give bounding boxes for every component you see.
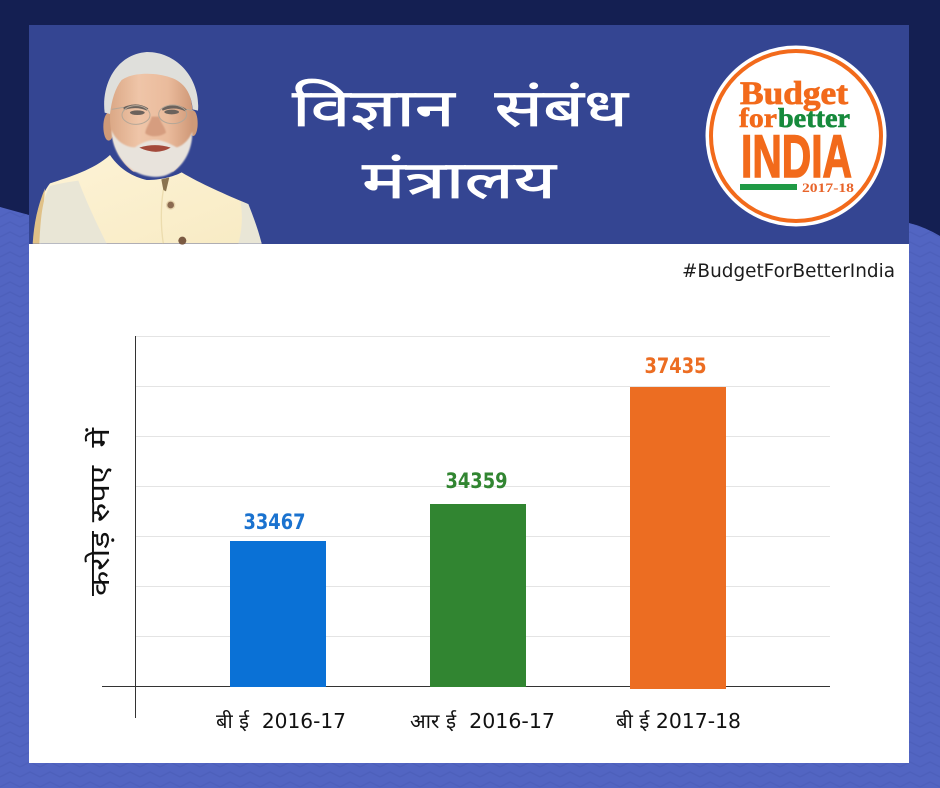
title bbox=[292, 80, 629, 210]
head bbox=[103, 52, 198, 177]
placket shading bbox=[161, 190, 163, 244]
left arm bbox=[39, 181, 107, 244]
bar chart bbox=[84, 336, 830, 733]
ears bbox=[103, 111, 198, 141]
portrait illustration bbox=[33, 52, 262, 245]
value 33467: 33467 bbox=[244, 510, 306, 534]
panel: white chart area bbox=[29, 244, 909, 763]
eyebrows and eyes bbox=[123, 104, 187, 115]
left sleeve edge bbox=[33, 188, 45, 244]
body bbox=[33, 155, 262, 245]
y axis label: करोड़ रुपए में bbox=[84, 427, 115, 596]
logo word better: better bbox=[778, 103, 850, 133]
right arm bbox=[238, 202, 262, 244]
hair bbox=[104, 52, 198, 114]
bar: BE 2016-17 bbox=[230, 541, 326, 687]
face bbox=[110, 68, 193, 172]
category label 3: बी ई 2017-18 bbox=[616, 709, 741, 733]
nose bbox=[145, 117, 166, 136]
value 37435: 37435 bbox=[644, 354, 706, 378]
value 34359: 34359 bbox=[446, 469, 508, 493]
logo word for: for bbox=[739, 103, 777, 133]
logo year: 2017-18 bbox=[802, 180, 855, 195]
title line 2: मंत्रालय bbox=[362, 152, 557, 210]
title line 1: विज्ञान संबंध bbox=[292, 80, 629, 138]
category label 1: बी ई 2016-17 bbox=[216, 709, 346, 733]
jacket buttons bbox=[166, 200, 186, 245]
category label 2: आर ई 2016-17 bbox=[410, 709, 555, 733]
neck notch bbox=[161, 177, 169, 191]
jacket bbox=[33, 155, 262, 244]
logo word INDIA: INDIA bbox=[741, 123, 852, 190]
bar: BE 2017-18 bbox=[630, 387, 726, 689]
hashtag: #BudgetForBetterIndia bbox=[682, 260, 895, 282]
logo green bar bbox=[740, 184, 797, 190]
beard bbox=[112, 130, 192, 177]
mouth bbox=[139, 145, 171, 152]
logo word Budget: Budget bbox=[740, 76, 848, 112]
glasses bbox=[112, 105, 193, 124]
bar: RE 2016-17 bbox=[430, 504, 526, 687]
logo badge bbox=[706, 46, 886, 226]
panel: header band bbox=[29, 25, 909, 244]
